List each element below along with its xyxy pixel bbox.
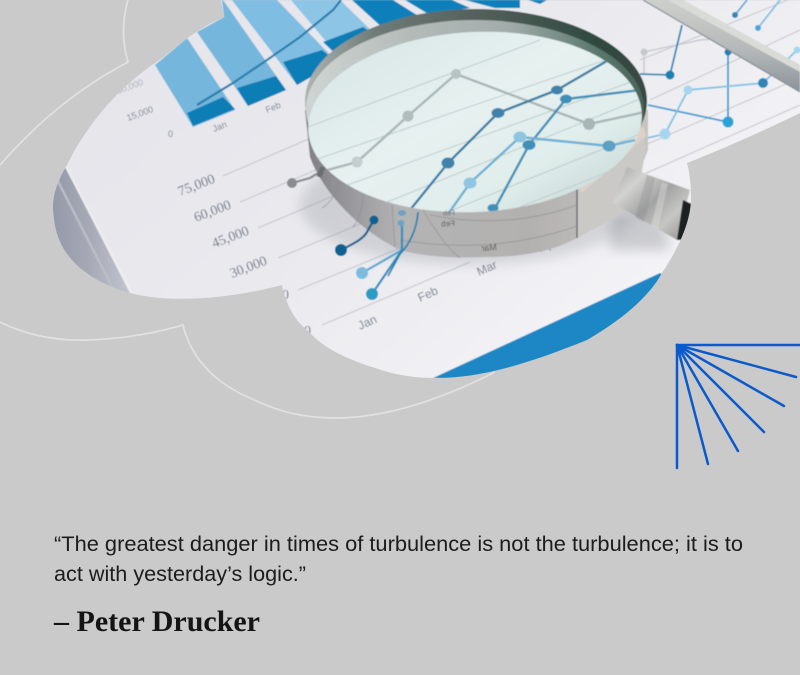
lower chart y-axis labels: 45,000 xyxy=(210,224,251,252)
top chart axis labels: 15,000 xyxy=(125,104,155,123)
lower chart y-axis labels: 60,000 xyxy=(192,198,233,226)
lower chart month labels xyxy=(358,248,552,330)
right charts xyxy=(640,0,797,138)
top bar chart xyxy=(155,0,547,127)
top chart axis labels: Jan xyxy=(211,119,228,134)
lower chart month labels: Jan xyxy=(356,312,379,333)
fan of blue rays xyxy=(677,345,800,468)
lower chart y-axis labels xyxy=(176,172,311,339)
glass lens xyxy=(304,23,646,221)
pen xyxy=(643,0,800,92)
decorative cloud outline xyxy=(0,0,495,418)
upper rim xyxy=(304,8,648,124)
paper stack edge xyxy=(53,168,130,293)
markers below lens xyxy=(287,167,406,300)
lower chart y-axis labels: 0 xyxy=(282,288,289,303)
reversed tick text on band: Feb xyxy=(443,210,455,217)
quote text: “The greatest danger in times of turbulence is not the turbulence; it is to xyxy=(54,533,743,556)
handle shadow xyxy=(610,205,670,250)
paper sheet xyxy=(40,0,800,390)
reversed month text on band: Feb xyxy=(440,219,455,228)
quote text: act with yesterday’s logic.” xyxy=(54,563,306,586)
top chart axis labels: 30,000 xyxy=(115,77,145,96)
top chart axis labels: Feb xyxy=(264,100,282,115)
right chart markers xyxy=(640,12,800,140)
fold lines on metal band xyxy=(322,196,576,258)
inner rim band xyxy=(306,19,644,124)
reversed text on metal band: Mar xyxy=(481,242,497,253)
chart lines over band and below lens xyxy=(292,172,418,294)
lower chart month labels: Feb xyxy=(416,283,440,305)
magnified chart xyxy=(300,40,650,215)
lower chart y-axis labels: 30,000 xyxy=(228,254,269,282)
grid lines xyxy=(223,0,800,325)
lower chart y-axis labels: 0 xyxy=(304,324,311,339)
quote text xyxy=(54,533,743,586)
blue bar at bottom xyxy=(433,272,662,378)
lower chart month labels: Apr xyxy=(537,234,559,255)
lower chart month labels: Mar xyxy=(475,258,499,279)
lens shadow xyxy=(298,176,636,268)
photo: magnifying glass over charts xyxy=(40,0,800,390)
handle ferrule xyxy=(613,167,694,240)
metal body xyxy=(305,110,648,257)
magnifying glass xyxy=(300,9,694,258)
attribution: – Peter Drucker xyxy=(53,605,260,638)
bracket xyxy=(578,153,644,237)
lower chart y-axis labels: 75,000 xyxy=(176,172,217,200)
top chart axis labels: 0 xyxy=(168,129,173,139)
top chart axis labels xyxy=(115,77,282,139)
